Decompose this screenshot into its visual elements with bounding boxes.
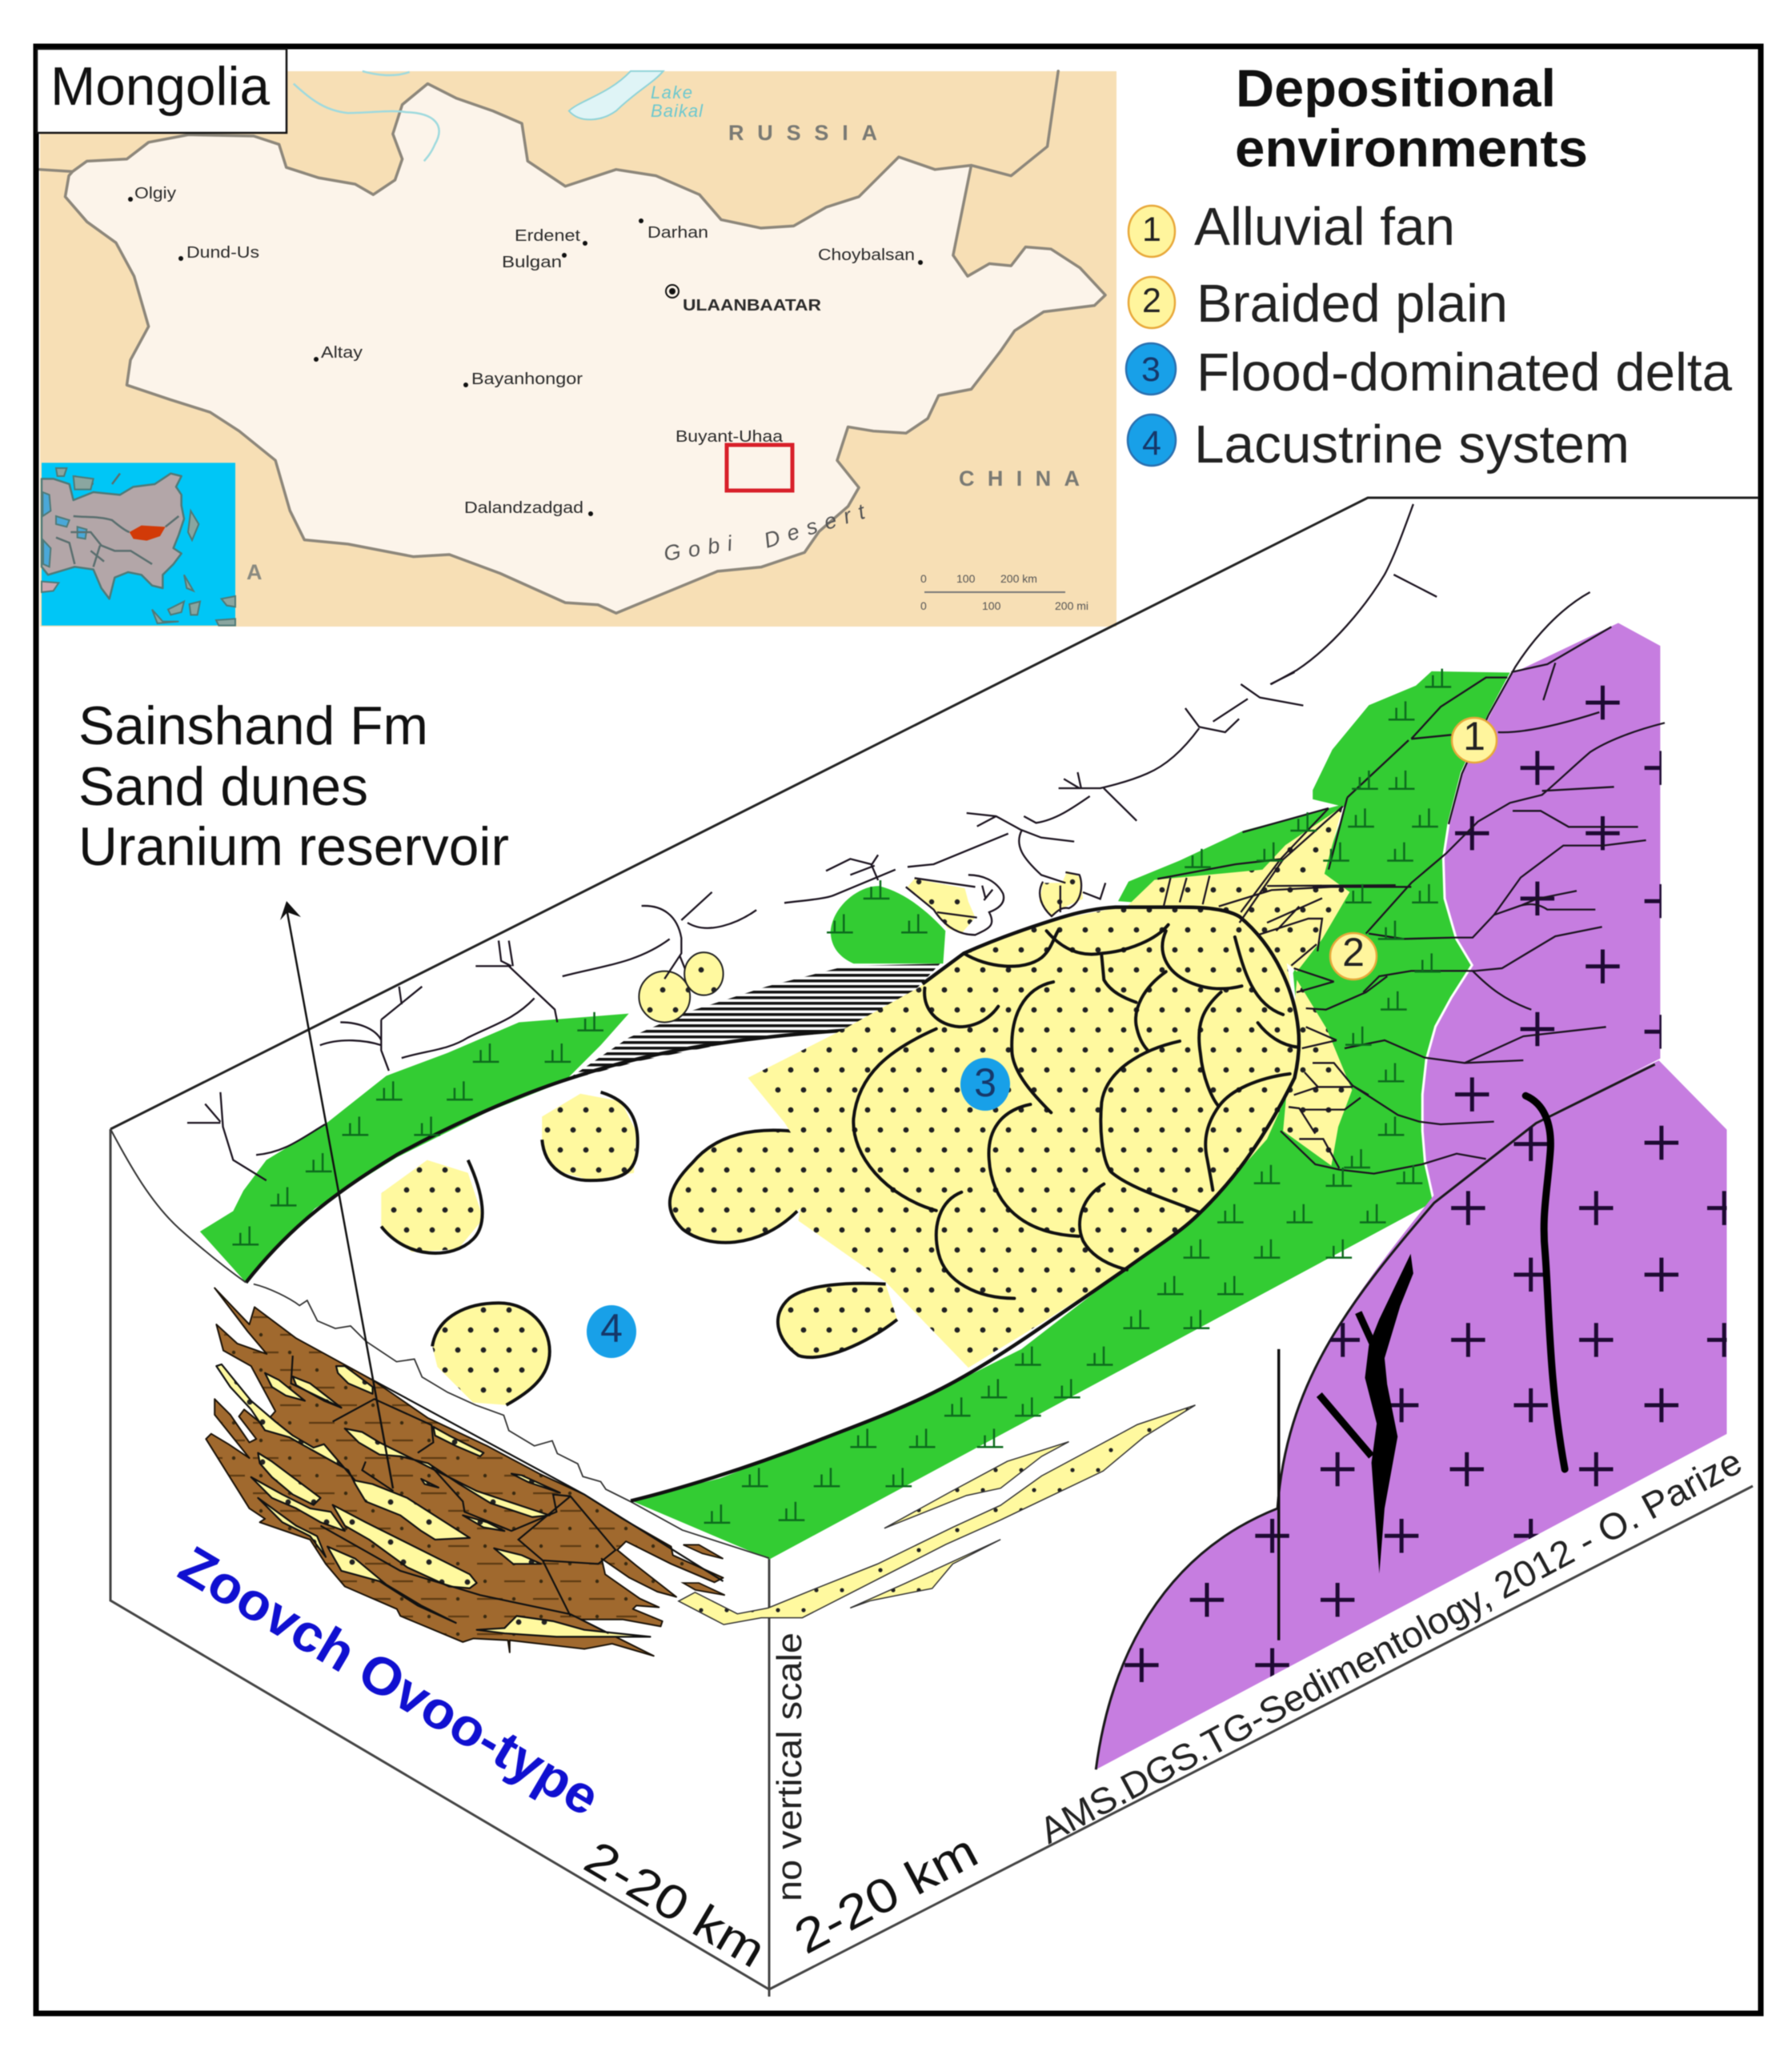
isolated lobe A [381, 1160, 483, 1253]
grass symbols on alluvial plain [232, 669, 1451, 1523]
arrow to Sainshand Fm [280, 901, 393, 1488]
map: place labels: Altay [321, 344, 363, 362]
north drainage and small lobes [784, 672, 1329, 935]
legend item 2: Braided plain [1197, 274, 1508, 334]
zigzag shoreline [254, 1284, 769, 1558]
map: place labels [134, 82, 1080, 584]
map: Lake Baikal and rivers [294, 71, 663, 161]
map: place labels: Baikal [651, 101, 704, 121]
numbered marker 1 [1452, 714, 1497, 763]
green hill [831, 886, 945, 963]
map: scale bar: 100 [956, 572, 976, 585]
map: scale bar: 0 [920, 572, 927, 585]
legend item 4: 4 [1142, 424, 1161, 463]
legend item 2: 2 [1142, 282, 1161, 320]
legend heading [1235, 58, 1588, 178]
numbered marker 2: 2 [1342, 930, 1365, 975]
map: place labels: Choybalsan [818, 246, 915, 264]
granite plus symbols [1125, 686, 1741, 1682]
upper river [1271, 504, 1437, 684]
isolated lobe E [778, 1284, 897, 1357]
front basement [1096, 1060, 1727, 1769]
upper basement [1422, 622, 1662, 1203]
brown body [206, 1288, 724, 1656]
map: place labels: Dalandzadgad [464, 499, 583, 517]
delta outer shoreline [631, 907, 1299, 1501]
legend heading: Depositional [1236, 58, 1556, 118]
map: place labels: Bulgan [502, 254, 562, 271]
map: place labels: Gobi [662, 531, 735, 566]
map: place labels: Bayanhongor [471, 371, 583, 388]
north stream lines [784, 672, 1303, 903]
map: scale bar: 200 mi [1055, 599, 1088, 612]
small upper lobes [639, 952, 724, 1022]
shoreline thick curve [246, 992, 913, 1283]
yellow sand strips, lower centre [679, 1405, 1196, 1624]
map: place labels: Lake [651, 82, 692, 102]
green alluvial plain, south and east [631, 671, 1511, 1560]
text block: Sainshand Fm [78, 695, 509, 877]
numbered marker 4 [587, 1305, 636, 1358]
delta lobe arcs [853, 925, 1298, 1298]
legend: depositional environments [1126, 58, 1733, 475]
map: place labels: Buyant-Uhaa [676, 428, 784, 446]
legend heading: environments [1235, 118, 1588, 178]
small lobe, middle [1040, 871, 1083, 918]
text block: Sainshand Fm: Sainshand Fm [78, 695, 428, 756]
legend item 4: Lacustrine system [1194, 415, 1630, 475]
text block: Sainshand Fm: Sand dunes [78, 756, 368, 817]
left slope and lake shoreline [110, 1129, 246, 1283]
legend item 3: Flood-dominated delta [1197, 343, 1733, 403]
drainage streams west [187, 892, 756, 1180]
map: place labels: ULAANBAATAR [683, 297, 822, 314]
numbered marker 2 [1330, 930, 1377, 979]
legend item 1: Alluvial fan [1194, 197, 1455, 257]
small lobe outlines [906, 808, 1329, 935]
legend item 1: 1 [1142, 210, 1161, 249]
map: place labels: Dund-Us [186, 244, 259, 262]
small lobe, left [908, 879, 976, 934]
streams over alluvial fan and upper basement, south [1281, 944, 1606, 1174]
map: scale bar [920, 572, 1088, 612]
map: place labels: Erdenet [515, 227, 581, 245]
outlier lenses [684, 1544, 725, 1595]
map: place labels: Darhan [647, 224, 708, 242]
map: place labels: CHINA [959, 467, 1080, 491]
map: study area red box [727, 445, 792, 491]
fan channel lines [1164, 807, 1396, 951]
label: scale left: 2-20 km [575, 1830, 775, 1978]
map panel: Mongolia location [40, 71, 1116, 627]
legend item 3: 3 [1141, 351, 1161, 389]
brown fluvial deposits, Zoovch Ovoo [206, 1288, 725, 1656]
map title box: Mongolia: Mongolia [50, 56, 270, 117]
label: Zoovch Ovoo-type: Zoovch Ovoo-type [170, 1534, 610, 1827]
label: no vertical scale: no vertical scale [770, 1632, 809, 1901]
map: place labels: RUSSIA [728, 121, 877, 145]
label: scale right: 2-20 km [786, 1824, 986, 1964]
map: city markers [128, 197, 923, 516]
black dykes in basement [1279, 1096, 1565, 1640]
isolated lobe C [670, 1130, 836, 1243]
map inset: Asia locator [42, 463, 235, 626]
braided plain fan upper [1127, 807, 1349, 971]
map: place labels: Olgiy [134, 185, 176, 202]
map: scale bar: 200 km [1000, 572, 1037, 585]
map: Mongolia country shape [40, 71, 1105, 613]
numbered marker 3 [960, 1058, 1010, 1111]
streams over alluvial fan and upper basement, north [1313, 592, 1665, 992]
hatched wedge [565, 963, 940, 1081]
map: place labels: A [247, 560, 263, 584]
map title box: Mongolia [37, 49, 287, 133]
isolated lobe D [432, 1303, 550, 1405]
purple basement blocks [1096, 622, 1727, 1769]
flood-dominated delta [748, 907, 1298, 1368]
western sector: green band, hatched wedge, lobes [110, 892, 940, 1558]
text block: Sainshand Fm: Uranium reservoir [78, 816, 509, 877]
numbered marker 1: 1 [1463, 714, 1485, 759]
brown body internal faults [291, 1356, 724, 1633]
map: place labels: Desert [761, 499, 868, 553]
map: scale bar: 100 [982, 599, 1001, 612]
block diagram outline [110, 498, 1758, 1997]
isolated lobe B [542, 1092, 638, 1180]
central sector: delta and fans [631, 807, 1396, 1501]
numbered marker 3: 3 [974, 1060, 996, 1105]
map: scale bar: 0 [920, 599, 927, 612]
yellow sand lenses [216, 1364, 650, 1636]
label: credit line: AMS.DGS.TG-Sedimentology, 2012 - O. Parize [1032, 1440, 1749, 1852]
numbered marker 4: 4 [600, 1306, 623, 1351]
braided plain fan east [1283, 979, 1352, 1166]
green band west [200, 1014, 629, 1283]
